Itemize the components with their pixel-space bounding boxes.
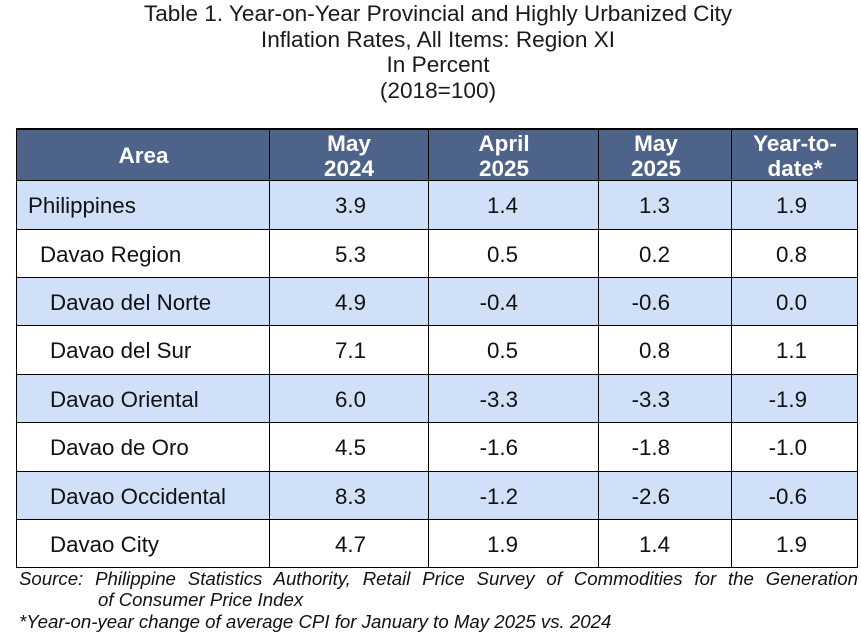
row: Davao Occidental: -1.2 — [480, 484, 518, 508]
row: Davao City: 1.9 — [487, 532, 518, 556]
row: Davao City — [50, 532, 807, 556]
row: Philippines: 1.9 — [776, 193, 807, 218]
header: Area: Area — [118, 143, 169, 168]
header: May 2025: 2025 — [631, 156, 681, 180]
row: Davao Occidental: Davao Occidental — [50, 484, 226, 508]
row: Davao Region: 0.5 — [487, 242, 518, 266]
title: Table 1. Year-on-Year Provincial and Highly Urbanized City — [144, 1, 732, 26]
source note continuation: of Consumer Price Index — [98, 589, 303, 610]
header: Year-to-date — [753, 130, 837, 180]
row: Davao de Oro: 4.5 — [335, 435, 366, 460]
row: Davao Oriental: -3.3 — [480, 386, 518, 412]
title: In Percent — [386, 52, 490, 77]
row: Philippines — [16, 181, 857, 229]
row: Davao del Sur: 0.8 — [639, 338, 670, 363]
row: Davao del Norte: 0.0 — [776, 290, 807, 314]
title — [144, 1, 732, 103]
row: Davao del Norte: Davao del Norte — [50, 290, 211, 314]
header: Year-to-date: Year-to- — [753, 130, 837, 156]
row: Davao del Sur: 7.1 — [335, 338, 366, 363]
row: Davao Occidental: -0.6 — [769, 484, 807, 508]
row: Davao de Oro — [50, 435, 807, 460]
row: Davao de Oro: -1.0 — [769, 435, 807, 460]
row: Davao del Sur — [50, 338, 807, 363]
row: Philippines: Philippines — [28, 193, 136, 218]
header: April 2025 — [478, 130, 530, 180]
header: May 2024: May — [327, 130, 371, 156]
header: May 2025 — [631, 130, 681, 180]
row: Philippines: 1.4 — [487, 193, 518, 218]
row: Davao Oriental — [16, 375, 857, 422]
row: Davao Oriental: -1.9 — [769, 386, 807, 412]
row: Davao del Norte — [16, 278, 857, 325]
header: April 2025: April — [478, 130, 530, 156]
row: Philippines: 1.3 — [639, 193, 670, 218]
title: Inflation Rates, All Items: Region XI — [261, 27, 615, 52]
row: Davao City: 4.7 — [335, 532, 366, 556]
row: Davao Oriental: 6.0 — [335, 386, 366, 412]
row: Davao del Norte: 4.9 — [335, 290, 366, 314]
row: Davao del Sur: Davao del Sur — [50, 338, 191, 363]
row: Davao Region — [40, 242, 807, 266]
row: Davao Occidental: -2.6 — [632, 484, 670, 508]
header: May 2024: 2024 — [324, 156, 374, 180]
row: Davao City: Davao City — [50, 532, 159, 556]
row: Davao Oriental: Davao Oriental — [50, 386, 199, 412]
header: May 2024 — [324, 130, 374, 180]
header: April 2025: 2025 — [479, 156, 529, 180]
row: Davao Occidental: 8.3 — [335, 484, 366, 508]
row: Davao City: 1.9 — [776, 532, 807, 556]
header row — [16, 128, 857, 180]
header: May 2025: May — [634, 130, 678, 156]
row: Davao Region: Davao Region — [40, 242, 181, 266]
row: Davao Occidental — [16, 472, 857, 519]
row: Davao Region: 0.2 — [639, 242, 670, 266]
row: Davao de Oro: -1.8 — [632, 435, 670, 460]
header: Year-to-date: date* — [767, 156, 823, 180]
row: Davao del Norte: -0.4 — [480, 290, 518, 314]
row: Davao de Oro: Davao de Oro — [50, 435, 189, 460]
row: Davao del Sur: 1.1 — [776, 338, 807, 363]
title: (2018=100) — [380, 78, 496, 103]
row: Davao Region: 0.8 — [776, 242, 807, 266]
row: Davao Oriental: -3.3 — [632, 386, 670, 412]
row: Davao del Sur: 0.5 — [487, 338, 518, 363]
source note: Source: Philippine Statistics Authority, Retail Price Survey of Commodities for the Generation — [19, 568, 858, 589]
row: Davao Region: 5.3 — [335, 242, 366, 266]
footnote: *Year-on-year change of average CPI for January to May 2025 vs. 2024 — [19, 611, 611, 632]
row: Philippines: 3.9 — [335, 193, 366, 218]
row: Davao City: 1.4 — [639, 532, 670, 556]
row: Davao del Norte: -0.6 — [632, 290, 670, 314]
row: Davao de Oro: -1.6 — [480, 435, 518, 460]
